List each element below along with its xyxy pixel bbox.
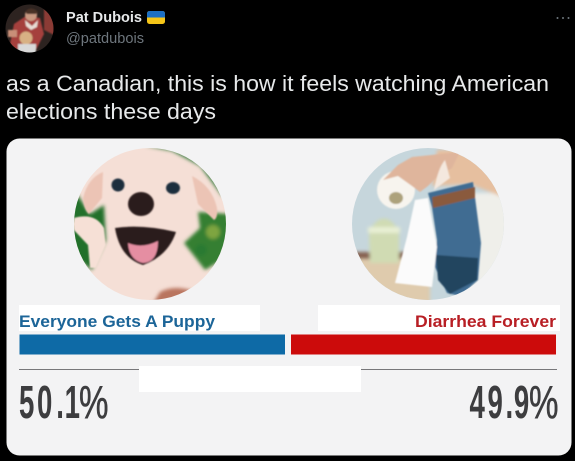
label: Diarrhea Forever bbox=[318, 305, 560, 331]
label: Everyone Gets A Puppy bbox=[19, 305, 260, 331]
value: 50.1%: 50.1 bbox=[19, 378, 80, 429]
author name: Pat Dubois bbox=[66, 10, 142, 26]
bar: red bbox=[291, 334, 556, 354]
value: 49.9%: 49.9 bbox=[470, 378, 529, 429]
tweet header bbox=[5, 4, 570, 54]
white center block bbox=[139, 366, 361, 392]
tweet text: as a Canadian, this is how it feels watching American bbox=[6, 71, 549, 96]
value: 50.1%: % bbox=[79, 378, 108, 428]
label: Diarrhea Forever: Diarrhea Forever bbox=[415, 312, 556, 331]
panel: poll graphic bbox=[6, 138, 572, 456]
value: 49.9%: % bbox=[529, 378, 558, 428]
value: 49.9% bbox=[470, 378, 558, 429]
left rule bbox=[19, 369, 139, 370]
avatar bbox=[5, 4, 56, 54]
right rule bbox=[361, 369, 557, 370]
icon: more menu bbox=[556, 17, 570, 19]
tweet text bbox=[6, 71, 549, 124]
handle: @patdubois bbox=[66, 31, 144, 47]
value: 50.1% bbox=[19, 378, 108, 429]
label: Everyone Gets A Puppy: Everyone Gets A Puppy bbox=[19, 312, 216, 331]
photo: toilet paper bbox=[350, 146, 510, 305]
icon: Ukraine flag bbox=[147, 11, 165, 24]
bar: blue bbox=[20, 334, 285, 354]
tweet text: elections these days bbox=[6, 99, 216, 124]
photo: puppy bbox=[74, 148, 226, 300]
